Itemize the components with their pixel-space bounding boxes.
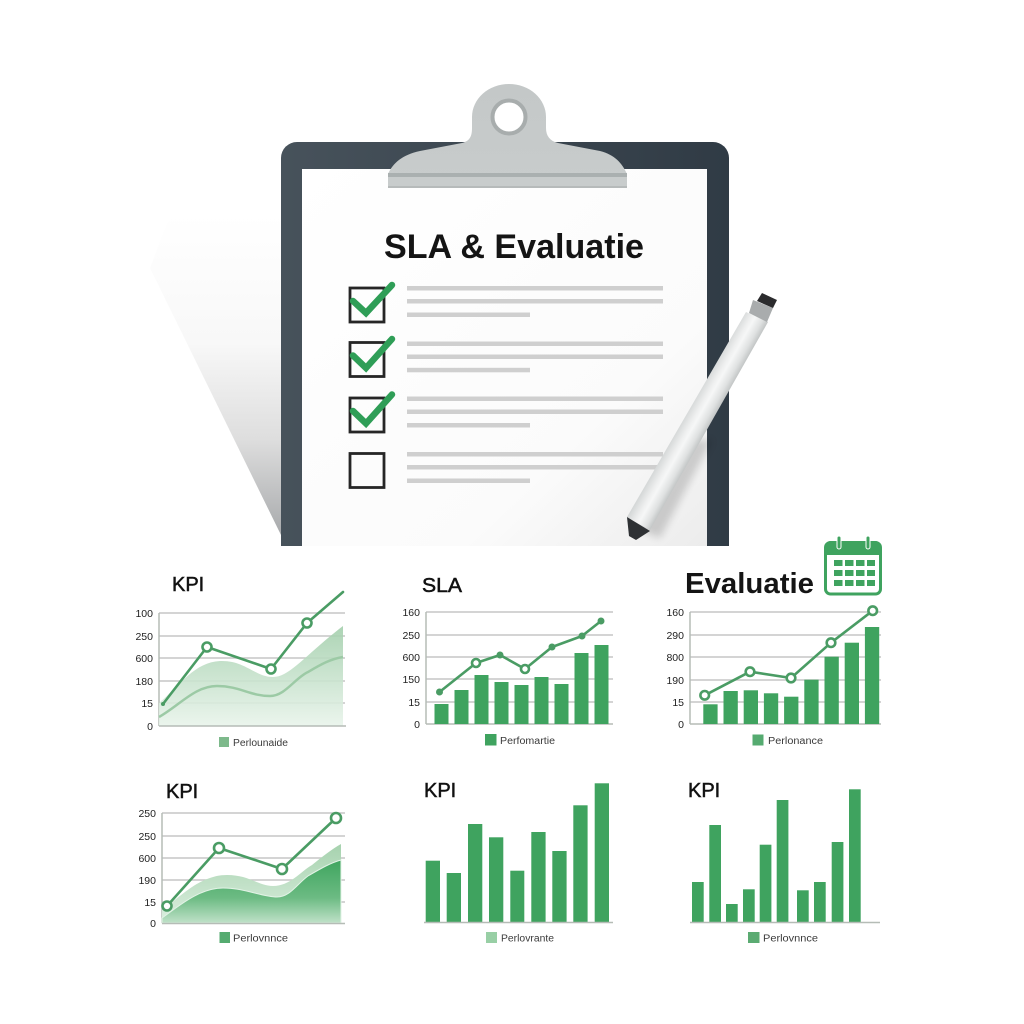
chart: KPI area top left [135, 574, 346, 749]
chart: KPI bars bottom right [688, 780, 880, 944]
y axis labels: 250 [402, 630, 420, 642]
y axis labels [666, 607, 684, 731]
chart: KPI bars bottom middle [424, 780, 613, 944]
checklist [350, 285, 663, 488]
y axis labels: 160 [402, 607, 420, 619]
legend [752, 734, 823, 747]
clip [388, 84, 627, 188]
y axis labels: 15 [408, 697, 420, 709]
y axis labels: 180 [135, 676, 153, 688]
legend: Perlonance [768, 736, 823, 747]
chart: SLA bars and line [402, 575, 613, 747]
chart title: KPI [688, 780, 720, 802]
area series [162, 844, 341, 923]
chart title: Evaluatie [685, 568, 814, 600]
y axis labels: 600 [135, 653, 153, 665]
y axis labels: 600 [138, 853, 156, 865]
y axis labels: 290 [666, 630, 684, 642]
y axis labels: 150 [402, 674, 420, 686]
pen body [627, 312, 768, 530]
y axis labels: 250 [138, 808, 156, 820]
checklist item 1 [350, 285, 663, 322]
bars [703, 627, 879, 724]
y axis labels: 190 [666, 675, 684, 687]
chart title: KPI [424, 780, 456, 802]
y axis labels: 15 [144, 897, 156, 909]
y axis labels: 250 [138, 831, 156, 843]
legend: Perlovnnce [233, 934, 288, 944]
y axis labels: 0 [150, 918, 156, 930]
pen [627, 293, 777, 540]
checklist item 3 [350, 394, 663, 432]
line series [161, 592, 343, 706]
y axis labels [138, 808, 156, 930]
chart: Evaluatie bars and line [666, 536, 881, 747]
y axis labels: 0 [147, 721, 153, 733]
legend [220, 932, 288, 944]
y axis labels: 250 [135, 631, 153, 643]
clipboard board [281, 142, 729, 546]
legend: Perlounaide [233, 738, 288, 749]
area series [159, 626, 343, 726]
bars [426, 783, 609, 922]
bars [434, 645, 608, 724]
pen cap [757, 293, 777, 308]
bars [692, 789, 861, 922]
y axis labels: 0 [678, 719, 684, 731]
chart title: KPI [166, 781, 198, 803]
clip hole [492, 100, 526, 134]
pen tip [627, 517, 650, 540]
legend [486, 932, 554, 944]
line series [436, 618, 604, 696]
legend: Perlovnnce [763, 934, 818, 944]
cast shadow behind clipboard [150, 215, 281, 535]
y axis labels: 15 [141, 698, 153, 710]
y axis labels: 190 [138, 875, 156, 887]
line series [162, 813, 341, 910]
chart title: SLA [422, 575, 463, 597]
pen collar [749, 300, 773, 322]
chart title: KPI [172, 574, 204, 596]
chart: KPI area bottom left [138, 781, 345, 944]
y axis labels [135, 608, 153, 733]
icon: calendar [825, 536, 881, 594]
checklist item 4 [350, 452, 663, 488]
y axis labels: 600 [402, 652, 420, 664]
y axis labels: 100 [135, 608, 153, 620]
legend: Perlovrante [501, 934, 554, 944]
title: SLA & Evaluatie [384, 228, 644, 266]
y axis labels [402, 607, 420, 731]
checklist item 2 [350, 339, 663, 376]
y axis labels: 160 [666, 607, 684, 619]
legend: Perfomartie [500, 736, 555, 747]
y axis labels: 0 [414, 719, 420, 731]
legend [748, 932, 818, 944]
y axis labels: 15 [672, 697, 684, 709]
line series [700, 606, 877, 700]
y axis labels: 800 [666, 652, 684, 664]
legend [485, 734, 555, 747]
paper sheet [302, 169, 707, 546]
